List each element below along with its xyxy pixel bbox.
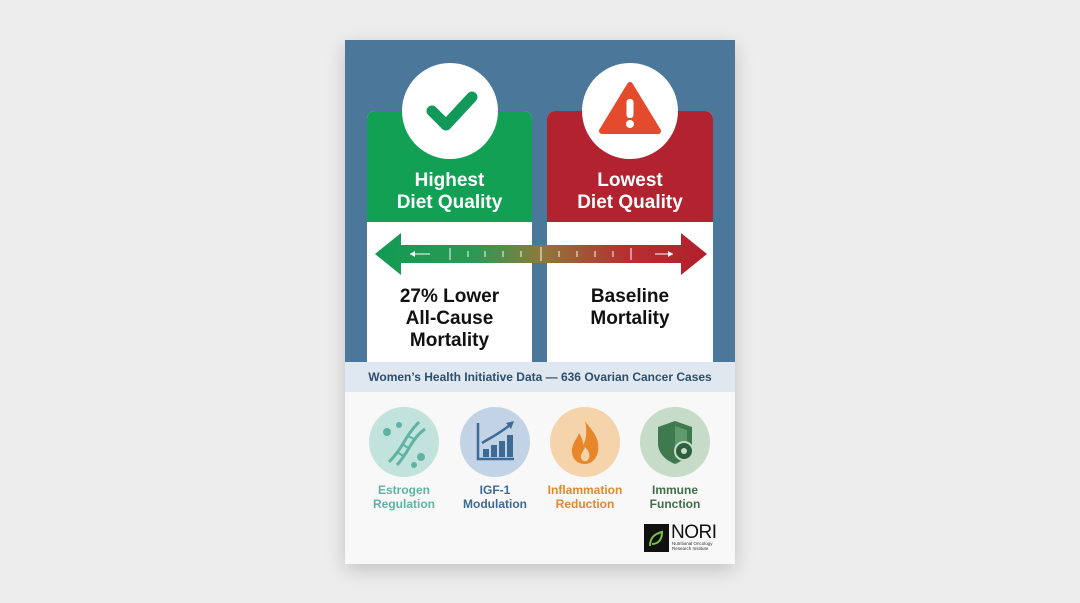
heading: lowest: Diet Quality: [577, 192, 683, 213]
label: inflammation: Reduction: [556, 497, 614, 511]
label: estrogen: [373, 483, 435, 511]
label: inflammation: [548, 483, 622, 511]
panel: highest diet quality: [367, 111, 532, 362]
heading: highest: Highest: [415, 170, 484, 191]
logo: NORI: Nutritional Oncology: [672, 541, 713, 546]
heading: highest: Diet Quality: [397, 192, 502, 213]
result text: [400, 286, 499, 351]
label: estrogen: Estrogen: [378, 483, 430, 497]
result text: Baseline: [591, 286, 669, 307]
icon: check circle: [402, 63, 498, 159]
label: igf-1: Modulation: [463, 497, 527, 511]
label: igf-1: IGF-1: [480, 483, 510, 497]
logo: NORI: Research Institute: [672, 546, 708, 551]
icon: warning circle: [582, 63, 678, 159]
logo: NORI: NORI: [671, 522, 716, 543]
heading: lowest: [577, 170, 683, 213]
icon: immune shield: [640, 407, 710, 477]
panel: lowest diet quality: [547, 111, 713, 362]
result text: Mortality: [590, 308, 670, 329]
green header: [367, 111, 532, 222]
label: igf-1: [463, 483, 527, 511]
label: immune: Function: [650, 497, 700, 511]
result text: Mortality: [410, 330, 489, 351]
result text: [590, 286, 670, 329]
result text: All-Cause: [406, 308, 493, 329]
banner: data source: Women’s Health Initiative Data — 636 Ovarian Cancer Cases: [368, 370, 712, 384]
blue top section: [345, 40, 735, 362]
icon: flame: [550, 407, 620, 477]
label: immune: [650, 483, 700, 511]
icon: igf-1 chart: [460, 407, 530, 477]
icon: estrogen dna: [369, 407, 439, 477]
heading: highest: [397, 170, 502, 213]
banner: data source: [345, 362, 735, 392]
label: immune: Immune: [652, 483, 698, 497]
label: inflammation: Inflammation: [548, 483, 622, 497]
arrow: gradient double arrow: [375, 233, 707, 275]
red header: [547, 111, 713, 222]
label: estrogen: Regulation: [373, 497, 435, 511]
heading: lowest: Lowest: [597, 170, 663, 191]
logo: NORI: [644, 522, 716, 552]
result text: 27% Lower: [400, 286, 499, 307]
poster card: [345, 40, 735, 564]
